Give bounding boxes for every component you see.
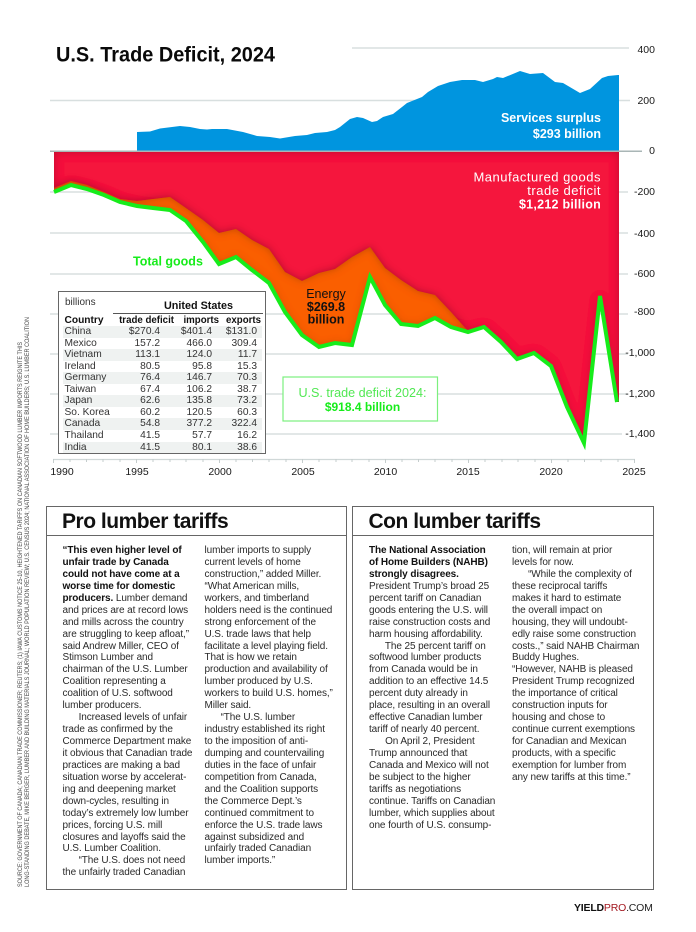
data table: trade by country: 60.3 <box>237 407 257 418</box>
table super header: United States <box>164 300 233 312</box>
x-axis: 2000 <box>208 466 232 478</box>
heading: pro <box>46 507 346 536</box>
source note (vertical) <box>17 317 31 887</box>
x-axis <box>50 459 646 478</box>
data table: trade by country: 309.4 <box>232 338 257 349</box>
data table: trade by country: 73.2 <box>237 395 257 406</box>
y-axis labels: -1,400 <box>625 428 655 440</box>
table column headers <box>64 314 261 326</box>
data table: trade by country: So. Korea <box>64 407 110 418</box>
data table: trade by country: Germany <box>64 372 106 383</box>
zero baseline <box>50 150 642 152</box>
table column headers: imports <box>183 314 219 326</box>
manufactured goods label <box>473 170 601 212</box>
table rows: China <box>64 326 91 337</box>
data table: trade by country: 135.8 <box>186 395 212 406</box>
data table: trade by country: 106.2 <box>186 384 212 395</box>
table rows: $270.4 <box>129 326 160 337</box>
x-axis: 1995 <box>125 466 149 478</box>
data table: trade by country: 113.1 <box>135 349 160 360</box>
table column headers: exports <box>226 314 261 326</box>
data table: trade by country: 70.3 <box>237 372 257 383</box>
chart: U.S. trade deficit area chart <box>50 42 655 478</box>
logo: yieldpro.com: YIELDPRO.COM <box>574 902 653 914</box>
data table: trade by country: 57.7 <box>192 430 212 441</box>
y-axis labels: -200 <box>634 186 655 198</box>
energy label: billion <box>308 312 344 326</box>
table rows <box>63 326 262 338</box>
y-axis labels <box>625 44 655 440</box>
data table: trade by country: 146.7 <box>186 372 212 383</box>
services surplus label: Services surplus <box>501 111 601 125</box>
data table: trade by country: Thailand <box>64 430 104 441</box>
panel: con lumber tariffs <box>352 506 654 890</box>
manufactured goods label: trade deficit <box>527 183 601 198</box>
data table: trade by country: 16.2 <box>237 430 257 441</box>
manufactured goods label: Manufactured goods <box>473 170 601 184</box>
data table: trade by country: 124.0 <box>186 349 212 360</box>
data table: trade by country: 54.8 <box>140 418 160 429</box>
table column headers: trade deficit <box>119 314 174 326</box>
data table: trade by country: Vietnam <box>64 349 102 360</box>
x-axis: 2015 <box>456 466 480 478</box>
table column headers: Country <box>64 314 104 326</box>
energy label: Energy <box>306 287 347 301</box>
data table: trade by country: 76.4 <box>140 372 160 383</box>
callout: trade deficit total: U.S. trade deficit 2024: <box>298 386 427 400</box>
x-axis: 2020 <box>539 466 563 478</box>
x-axis: 1990 <box>50 466 74 478</box>
data table: trade by country: 38.7 <box>237 384 257 395</box>
energy label: $269.8 <box>307 300 345 314</box>
x-axis: 2005 <box>291 466 315 478</box>
data table: trade by country <box>58 291 266 454</box>
data table: trade by country: 60.2 <box>140 407 160 418</box>
services surplus area <box>137 71 619 151</box>
energy label <box>306 287 347 326</box>
y-axis labels: -1,000 <box>625 347 655 359</box>
data table: trade by country: 41.5 <box>140 430 160 441</box>
heading: con <box>353 507 652 536</box>
text: pro column 2: lumber imports to supply current levels of home construction,” added Miller. “What American mills, workers, and timberland holders need is the continued strong enforcement of the U.S. trade laws that help facilitate a level playing field. That is how we retain production and availability of lumber produced by U.S. workers to build U.S. homes,” Miller said. “The U.S. lumber industry established its right to the imposition of anti- dumping and countervailing duties in the face of unfair competition from Canada, and the Coalition supports the Commerce Dept.’s continued commitment to enforce the U.S. trade laws against subsidized and unfairly traded Canadian lumber imports.” <box>204 545 333 866</box>
heading: pro: Pro lumber tariffs <box>62 510 228 533</box>
data table: trade by country: 157.2 <box>134 338 160 349</box>
manufactured goods deficit area <box>54 152 619 443</box>
data table: trade by country: Mexico <box>64 338 97 349</box>
data table: trade by country: Japan <box>64 395 92 406</box>
y-axis labels: 400 <box>637 44 655 56</box>
data table: trade by country: 80.1 <box>192 442 212 452</box>
chart title: U.S. Trade Deficit, 2024 <box>56 42 275 66</box>
text: pro column 1: “This even higher level of unfair trade by Canada could not have come at a worse time for domestic producers. Lumber demand and prices are at record lows and mills across the country are struggling to keep afloat,” said Andrew Miller, CEO of Stimson Lumber and chairman of the U.S. Lumber Coalition representing a coalition of U.S. softwood lumber producers. Increased levels of unfair trade as confirmed by the Commerce Department make it obvious that Canadian trade practices are making a bad situation worse by accelerat- ing and deepening market down-cycles, resulting in today’s extremely low lumber prices, forcing U.S. mill closures and layoffs said the U.S. Lumber Coalition. “The U.S. does not need the unfairly traded Canadian <box>62 545 192 878</box>
data table: trade by country: 322.4 <box>232 418 257 429</box>
data table: trade by country: 80.5 <box>140 361 160 372</box>
callout: trade deficit total: $918.4 billion <box>325 400 400 414</box>
manufactured goods label: $1,212 billion <box>519 198 601 212</box>
data table: trade by country: 67.4 <box>140 384 160 395</box>
data table: trade by country: 62.6 <box>140 395 160 406</box>
shadow cast by energy area <box>54 181 468 347</box>
y-axis labels: -1,200 <box>625 388 655 400</box>
data table: trade by country: Ireland <box>64 361 96 372</box>
y-axis labels: 200 <box>637 95 655 107</box>
data table: trade by country: 15.3 <box>237 361 257 372</box>
y-axis labels: 0 <box>649 145 655 157</box>
data table: trade by country: 377.2 <box>186 418 212 429</box>
data table: trade by country: 120.5 <box>186 407 212 418</box>
total goods line <box>54 185 617 443</box>
panel: pro lumber tariffs <box>46 506 347 890</box>
table unit note: billions <box>65 296 96 308</box>
x-axis: 2025 <box>622 466 646 478</box>
table rows: $401.4 <box>181 326 212 337</box>
data table: trade by country: 41.5 <box>140 442 160 452</box>
y-axis labels: -800 <box>634 306 655 318</box>
y-axis labels: -600 <box>634 268 655 280</box>
data table: trade by country: Taiwan <box>64 384 96 395</box>
table rows: $131.0 <box>226 326 257 337</box>
data table: trade by country: 38.6 <box>237 442 257 452</box>
data table: trade by country: 11.7 <box>238 349 257 360</box>
table super header <box>113 301 262 314</box>
services surplus label <box>501 111 601 141</box>
callout: trade deficit total <box>283 377 438 421</box>
data table: trade by country: India <box>64 442 87 452</box>
y-axis labels: -400 <box>634 228 655 240</box>
data table: trade by country: Canada <box>64 418 100 429</box>
x-axis: 2010 <box>374 466 397 478</box>
data table: trade by country: 95.8 <box>192 361 212 372</box>
services surplus label: $293 billion <box>533 127 601 141</box>
total goods label: Total goods <box>133 254 203 268</box>
text: con column 1: The National Association of Home Builders (NAHB) strongly disagrees. President Trump’s broad 25 percent tariff on Canadian goods entering the U.S. will raise construction costs and harm housing affordability. The 25 percent tariff on softwood lumber products from Canada would be in addition to an effective 14.5 percent duty already in place, resulting in an overall effective Canadian lumber tariff of nearly 40 percent. On April 2, President Trump announced that Canada and Mexico will not be subject to the higher tariffs as negotiations continue. Tariffs on Canadian lumber, which supplies about one fourth of U.S. consump- <box>369 545 495 831</box>
data table: trade by country: 466.0 <box>186 338 212 349</box>
energy deficit area <box>54 181 468 347</box>
text: con column 2: tion, will remain at prior levels for now. “While the complexity of these reciprocal tariffs makes it hard to estimate the overall impact on housing, they will undoubt- edly raise some construction costs.,” said NAHB Chairman Buddy Hughes. “However, NAHB is pleased President Trump recognized the importance of critical construction inputs for housing and chose to continue current exemptions for Canadian and Mexican products, with a specific exemption for lumber from any new tariffs at this time.” <box>512 545 639 783</box>
heading: con: Con lumber tariffs <box>368 510 541 533</box>
